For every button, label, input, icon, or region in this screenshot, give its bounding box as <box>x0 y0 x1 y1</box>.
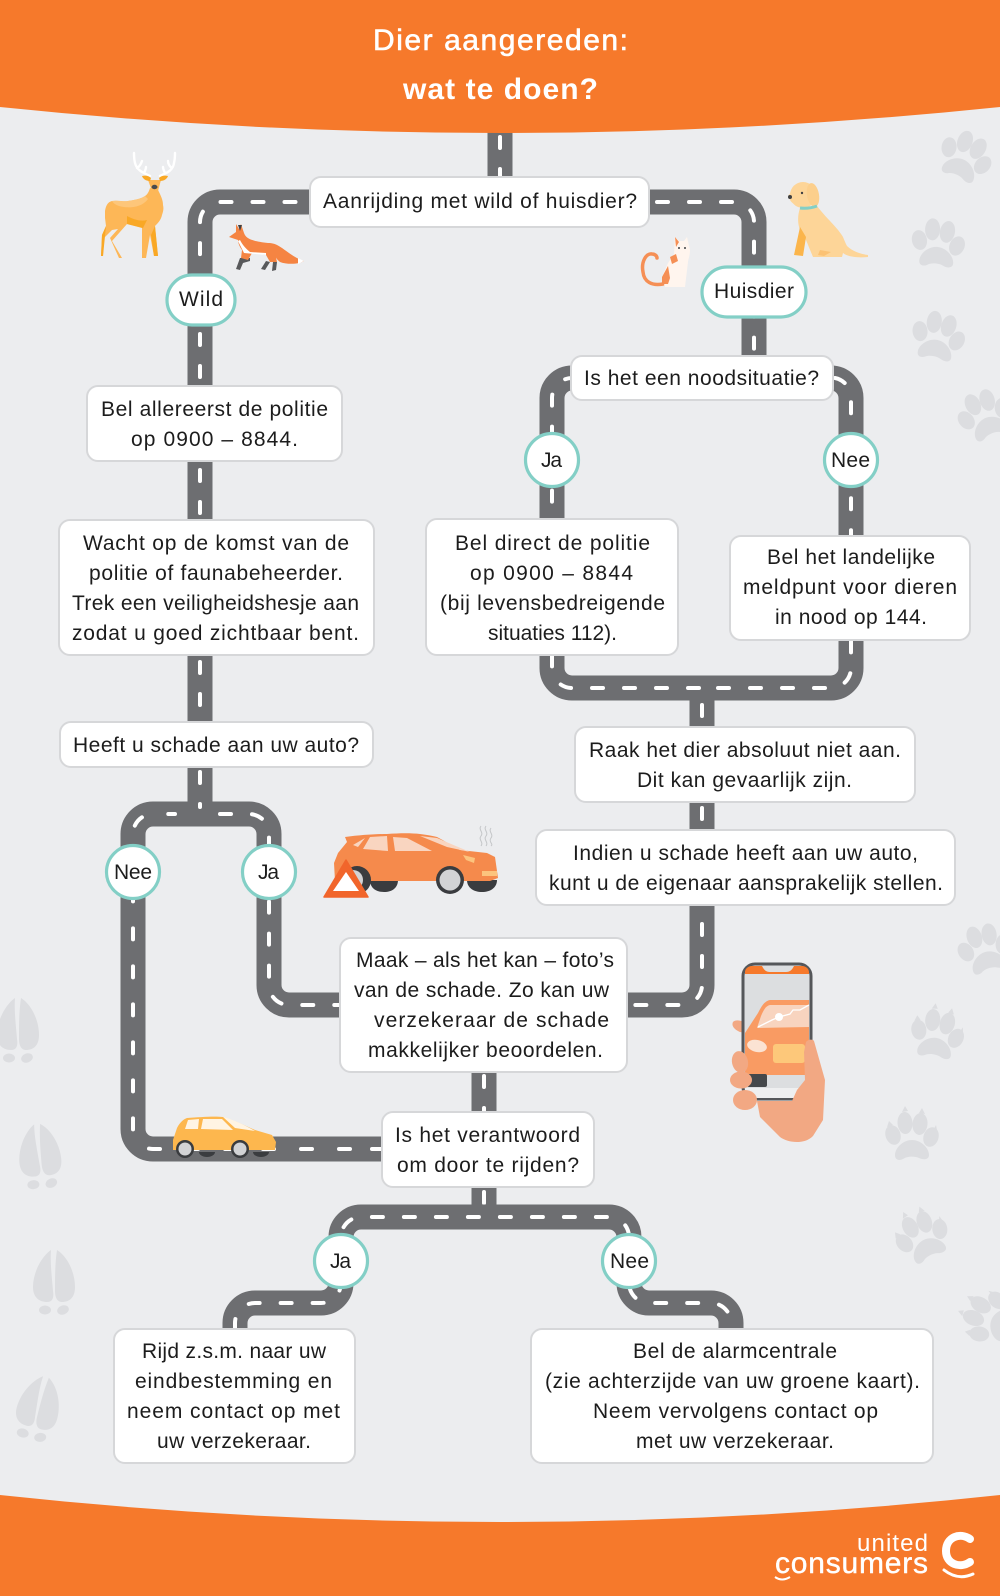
text box: landelijk meldpunt: meldpunt voor dieren <box>743 576 957 599</box>
logo: united consumers <box>775 1530 973 1580</box>
background paw prints <box>883 122 1000 1354</box>
text box: bel de alarmcentrale: (zie achterzijde van uw groene kaart). <box>545 1370 920 1393</box>
text box: eigenaar aansprakelijk: Indien u schade heeft aan uw auto, <box>573 842 918 865</box>
node: nee (doorrijden) <box>602 1234 656 1288</box>
logo: united consumers: united <box>857 1530 928 1557</box>
text box: maak foto's: verzekeraar de schade <box>374 1009 609 1032</box>
text box: bel allereerst de politie: Bel allereerst de politie <box>101 398 328 421</box>
text box: wacht op de komst <box>59 520 374 655</box>
icon: fox <box>229 224 304 271</box>
question box: noodsituatie <box>571 356 833 400</box>
text box: rijd naar eindbestemming: Rijd z.s.m. naar uw <box>142 1340 327 1363</box>
question box: doorrijden: Is het verantwoord <box>395 1124 580 1147</box>
background hoof prints <box>0 998 75 1446</box>
icon: dog <box>788 182 868 257</box>
text box: bel de alarmcentrale <box>531 1329 933 1463</box>
text box: bel direct de politie: Bel direct de politie <box>455 532 650 555</box>
node: ja (schade): Ja <box>258 861 279 884</box>
node: ja (noodsituatie) <box>526 434 578 486</box>
text box: wacht op de komst: Wacht op de komst van de <box>83 532 349 555</box>
icon: deer <box>101 153 175 258</box>
question box: schade aan auto <box>60 722 373 767</box>
text box: rijd naar eindbestemming: neem contact op met <box>127 1400 340 1423</box>
text box: bel allereerst de politie <box>87 386 342 461</box>
node: nee (schade) <box>106 846 160 898</box>
question box: aanrijding <box>310 177 649 227</box>
icon: cat <box>643 237 690 287</box>
text box: raak het dier niet aan <box>575 727 915 802</box>
node: huisdier <box>702 267 806 317</box>
node: huisdier: Huisdier <box>714 280 794 303</box>
text box: rijd naar eindbestemming: uw verzekeraar. <box>157 1430 311 1453</box>
text box: bel de alarmcentrale: Bel de alarmcentrale <box>633 1340 837 1363</box>
question box: doorrijden: om door te rijden? <box>397 1154 579 1177</box>
text box: bel de alarmcentrale: Neem vervolgens contact op <box>593 1400 878 1423</box>
roads network <box>133 125 851 1335</box>
text box: rijd naar eindbestemming: eindbestemming en <box>135 1370 332 1393</box>
text box: maak foto's: van de schade. Zo kan uw <box>354 979 610 1002</box>
text box: maak foto's <box>340 938 627 1072</box>
node: ja (schade) <box>242 846 296 898</box>
text box: bel direct de politie: (bij levensbedreigende <box>440 592 665 615</box>
icon: damaged orange car with warning triangle <box>324 826 498 897</box>
title: wat te doen? <box>402 73 598 106</box>
text box: raak het dier niet aan: Raak het dier absoluut niet aan. <box>589 739 901 762</box>
header banner <box>0 0 1000 133</box>
text box: wacht op de komst: zodat u goed zichtbaar bent. <box>72 622 359 645</box>
node: wild: Wild <box>179 288 223 311</box>
node: nee (doorrijden): Nee <box>610 1250 649 1273</box>
node: wild <box>167 275 235 325</box>
text box: landelijk meldpunt: Bel het landelijke <box>767 546 935 569</box>
node: ja (doorrijden): Ja <box>330 1250 351 1273</box>
text box: bel direct de politie: op 0900 – 8844 <box>470 562 633 585</box>
title <box>373 24 628 106</box>
question box: schade aan auto: Heeft u schade aan uw auto? <box>73 734 359 757</box>
node: nee (noodsituatie): Nee <box>831 449 870 472</box>
text box: landelijk meldpunt: in nood op 144. <box>775 606 927 629</box>
text box: maak foto's: makkelijker beoordelen. <box>368 1039 603 1062</box>
text box: wacht op de komst: politie of faunabeheerder. <box>89 562 343 585</box>
question box: doorrijden <box>382 1112 594 1187</box>
node: ja (doorrijden) <box>314 1234 368 1288</box>
text box: raak het dier niet aan: Dit kan gevaarlijk zijn. <box>637 769 852 792</box>
footer banner <box>0 1495 1000 1596</box>
icon: hand holding phone with damaged car photo <box>730 964 825 1142</box>
node: nee (schade): Nee <box>114 861 152 884</box>
node: ja (noodsituatie): Ja <box>541 449 562 472</box>
question box: noodsituatie: Is het een noodsituatie? <box>584 367 819 390</box>
text box: bel direct de politie <box>426 519 678 655</box>
text box: landelijk meldpunt <box>730 536 970 640</box>
logo: united consumers: consumers <box>775 1547 928 1580</box>
node: nee (noodsituatie) <box>824 434 878 486</box>
text box: eigenaar aansprakelijk <box>536 830 955 905</box>
question box: aanrijding: Aanrijding met wild of huisdier? <box>323 190 637 213</box>
text box: bel de alarmcentrale: met uw verzekeraar. <box>636 1430 834 1453</box>
title: Dier aangereden: <box>373 24 628 57</box>
text box: bel allereerst de politie: op 0900 – 8844. <box>131 428 298 451</box>
text box: rijd naar eindbestemming <box>114 1329 355 1463</box>
text box: wacht op de komst: Trek een veiligheidshesje aan <box>72 592 359 615</box>
icon: yellow car on road <box>173 1117 276 1158</box>
text box: eigenaar aansprakelijk: kunt u de eigenaar aansprakelijk stellen. <box>549 872 943 895</box>
text box: bel direct de politie: situaties 112). <box>488 622 617 645</box>
text box: maak foto's: Maak – als het kan – foto’s <box>356 949 614 972</box>
